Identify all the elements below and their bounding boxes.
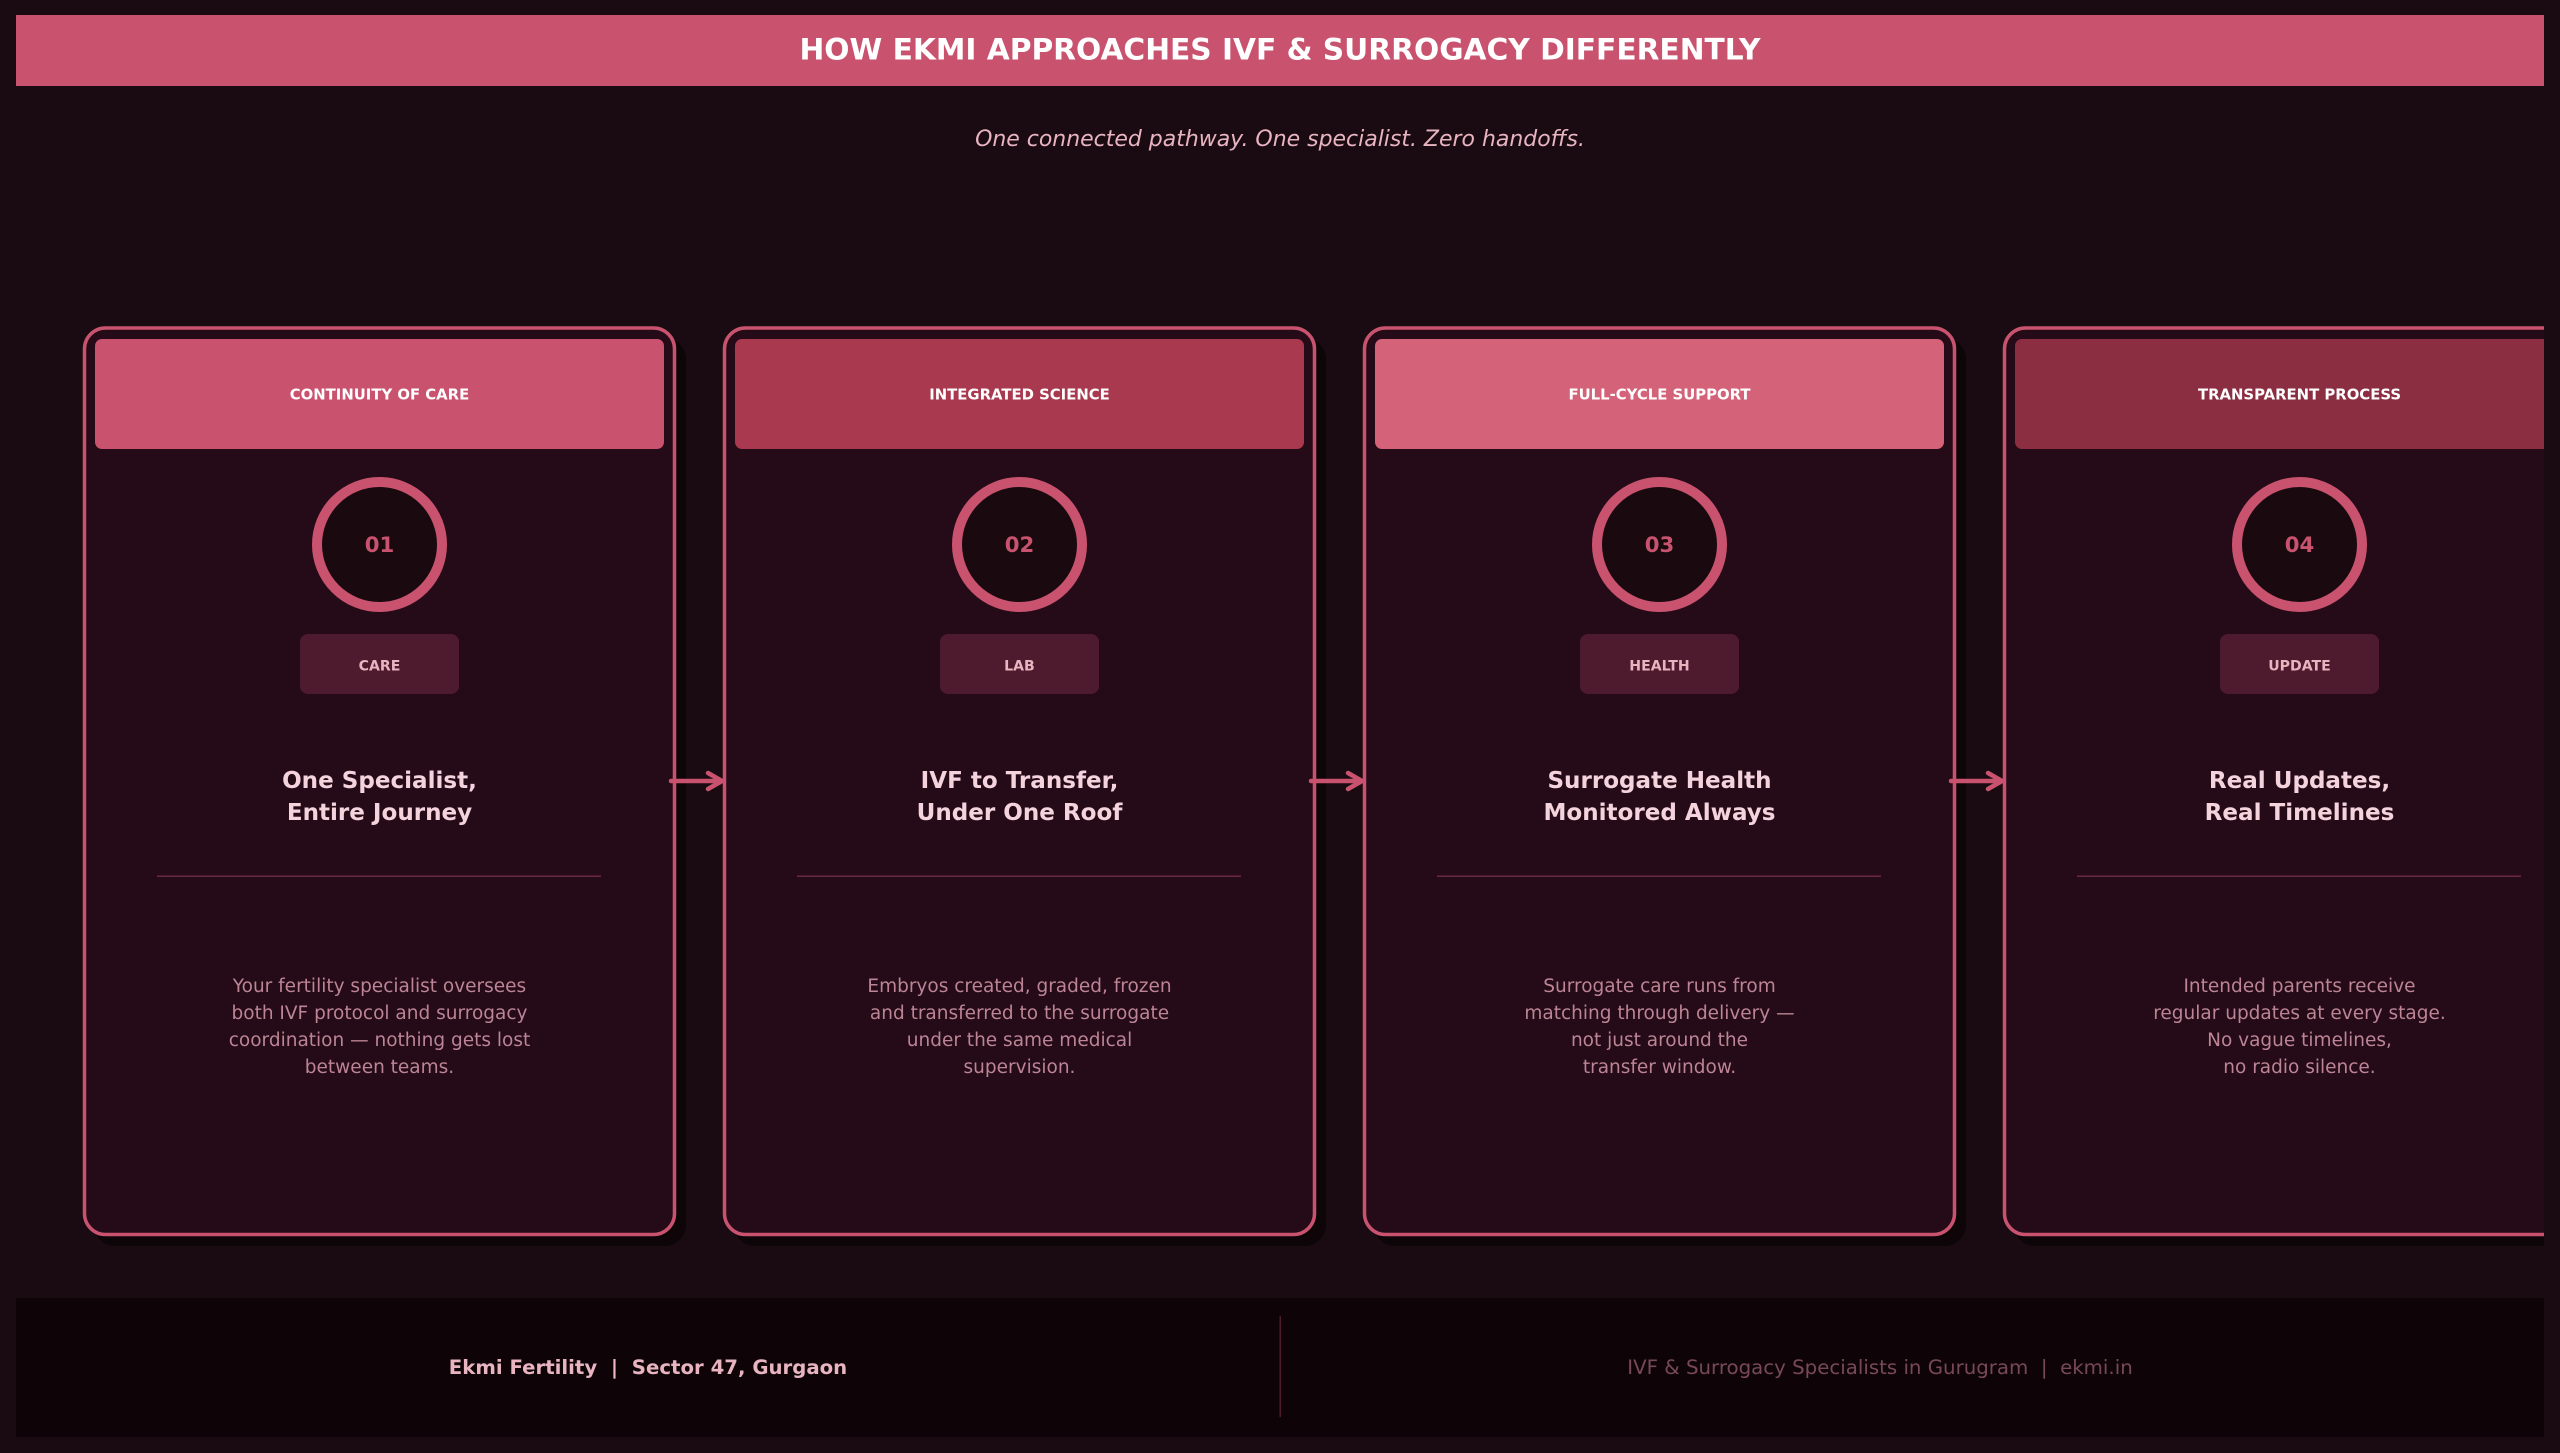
body text: Surrogate care runs from — [1543, 976, 1776, 997]
number badge 01 — [317, 482, 442, 607]
heading: Surrogate Health — [1547, 768, 1772, 794]
tag: care: CARE — [359, 658, 400, 674]
body text: supervision. — [964, 1057, 1075, 1078]
heading: Real Updates, — [2209, 768, 2390, 794]
body text: regular updates at every stage. — [2153, 1003, 2446, 1024]
body text: between teams. — [305, 1057, 454, 1078]
body text: not just around the — [1571, 1030, 1748, 1051]
body text: transfer window. — [1583, 1057, 1736, 1078]
band: continuity of care: CONTINUITY OF CARE — [290, 386, 469, 404]
arrow 1 to 2 — [671, 773, 722, 789]
body text: no radio silence. — [2223, 1057, 2376, 1078]
tag: update: UPDATE — [2268, 658, 2331, 674]
footer right text: IVF & Surrogacy Specialists in Gurugram | ekmi.in — [1627, 1356, 2133, 1379]
panel: integrated science — [724, 328, 1326, 1246]
band: full-cycle support — [1375, 339, 1944, 449]
band: continuity of care — [95, 339, 664, 449]
number badge 03 — [1597, 482, 1722, 607]
heading: Entire Journey — [287, 800, 472, 826]
tag: care — [300, 634, 459, 694]
heading: Under One Roof — [917, 800, 1123, 826]
number badge 04 — [2237, 482, 2362, 607]
tag: health: HEALTH — [1629, 658, 1690, 674]
body text: matching through delivery — — [1524, 1003, 1795, 1024]
band: full-cycle support: FULL-CYCLE SUPPORT — [1568, 386, 1751, 404]
arrow 3 to 4 — [1951, 773, 2002, 789]
body text: Intended parents receive — [2183, 976, 2416, 997]
arrow 2 to 3 — [1311, 773, 1362, 789]
panel: transparent process — [2004, 328, 2560, 1246]
number badge 03: 03 — [1645, 532, 1674, 557]
body text: under the same medical — [907, 1030, 1132, 1051]
band: transparent process — [2015, 339, 2560, 449]
body text: No vague timelines, — [2207, 1030, 2392, 1051]
panel: full-cycle support — [1364, 328, 1966, 1246]
body text: coordination — nothing gets lost — [229, 1030, 530, 1051]
band: integrated science: INTEGRATED SCIENCE — [929, 386, 1110, 404]
band: integrated science — [735, 339, 1304, 449]
title banner — [16, 15, 2544, 86]
tag: health — [1580, 634, 1739, 694]
heading: IVF to Transfer, — [921, 768, 1118, 794]
number badge 02: 02 — [1005, 532, 1034, 557]
title banner: HOW EKMI APPROACHES IVF & SURROGACY DIFFERENTLY — [799, 32, 1761, 66]
body text: both IVF protocol and surrogacy — [232, 1003, 528, 1024]
heading: Monitored Always — [1543, 800, 1776, 826]
heading: Real Timelines — [2205, 800, 2394, 826]
number badge 04: 04 — [2285, 532, 2314, 557]
tag: update — [2220, 634, 2379, 694]
panel: continuity of care — [84, 328, 686, 1246]
body text: and transferred to the surrogate — [870, 1003, 1169, 1024]
body text: Embryos created, graded, frozen — [867, 976, 1172, 997]
subtitle: One connected pathway. One specialist. Zero handoffs. — [975, 127, 1585, 152]
footer left text: Ekmi Fertility | Sector 47, Gurgaon — [449, 1356, 847, 1379]
band: transparent process: TRANSPARENT PROCESS — [2198, 386, 2401, 404]
panels row — [84, 328, 2560, 1246]
tag: lab — [940, 634, 1099, 694]
number badge 01: 01 — [365, 532, 394, 557]
heading: One Specialist, — [282, 768, 477, 794]
number badge 02 — [957, 482, 1082, 607]
tag: lab: LAB — [1004, 658, 1035, 674]
footer — [16, 1298, 2544, 1437]
body text: Your fertility specialist oversees — [232, 976, 526, 997]
